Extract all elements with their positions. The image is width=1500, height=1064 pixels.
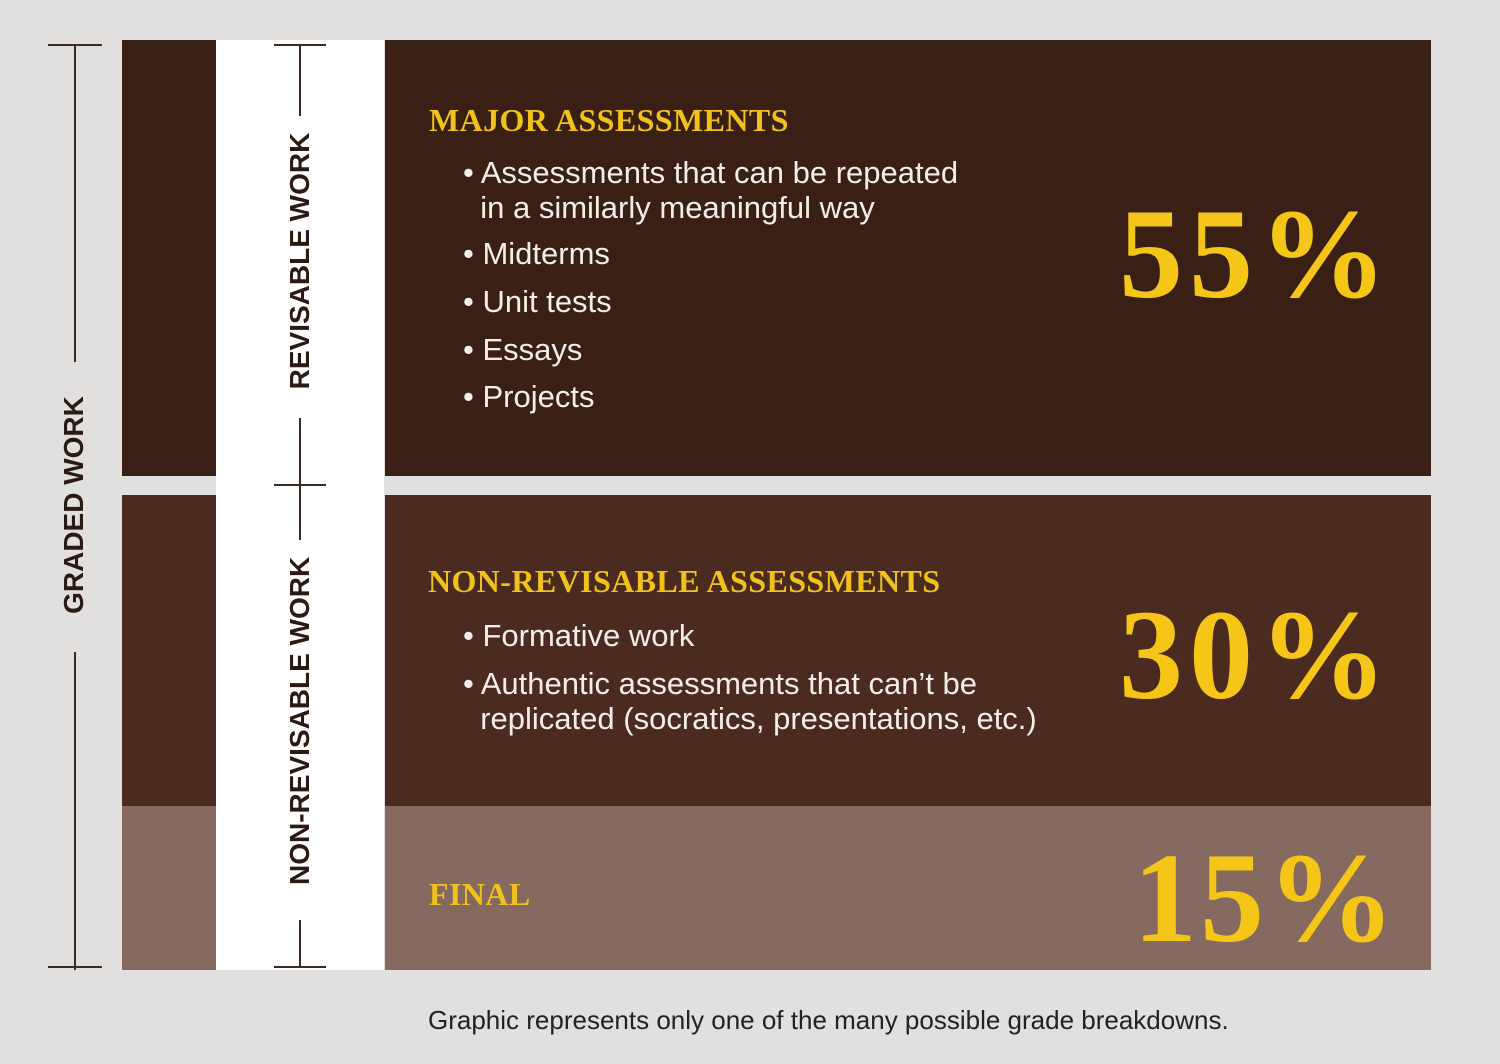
panel: non-revisable assessments [385, 495, 1431, 806]
bracket: graded work: GRADED WORK [58, 396, 89, 614]
white column [216, 40, 384, 970]
panel: major assessments: • Assessments that can be repeated [463, 155, 958, 190]
panel: non-revisable assessments: • Formative work [463, 618, 694, 653]
footnote: Graphic represents only one of the many possible grade breakdowns. [428, 1005, 1229, 1035]
label: non-revisable work: NON-REVISABLE WORK [284, 557, 315, 885]
left column blocks [122, 40, 216, 970]
panel: final [385, 806, 1431, 970]
panel: final: FINAL [429, 876, 531, 912]
panel: major assessments [385, 40, 1431, 476]
panel: major assessments: • Essays [463, 332, 582, 367]
label: revisable work: REVISABLE WORK [284, 133, 315, 389]
panel: non-revisable assessments: 30% [1119, 584, 1393, 726]
panel: non-revisable assessments: NON-REVISABLE ASSESSMENTS [428, 563, 940, 599]
panel: non-revisable assessments: replicated (socratics, presentations, etc.) [480, 701, 1037, 736]
panel: major assessments: • Projects [463, 379, 594, 414]
panel: major assessments: • Unit tests [463, 284, 612, 319]
panel: major assessments: MAJOR ASSESSMENTS [429, 102, 789, 138]
panel: non-revisable assessments: • Authentic assessments that can’t be [463, 666, 977, 701]
panel: major assessments: 55% [1119, 183, 1393, 325]
panel: final: 15% [1133, 827, 1398, 969]
panel: major assessments: • Midterms [463, 236, 610, 271]
panel: major assessments: in a similarly meaningful way [480, 190, 875, 225]
bracket: revisable / non-revisable [274, 44, 326, 968]
